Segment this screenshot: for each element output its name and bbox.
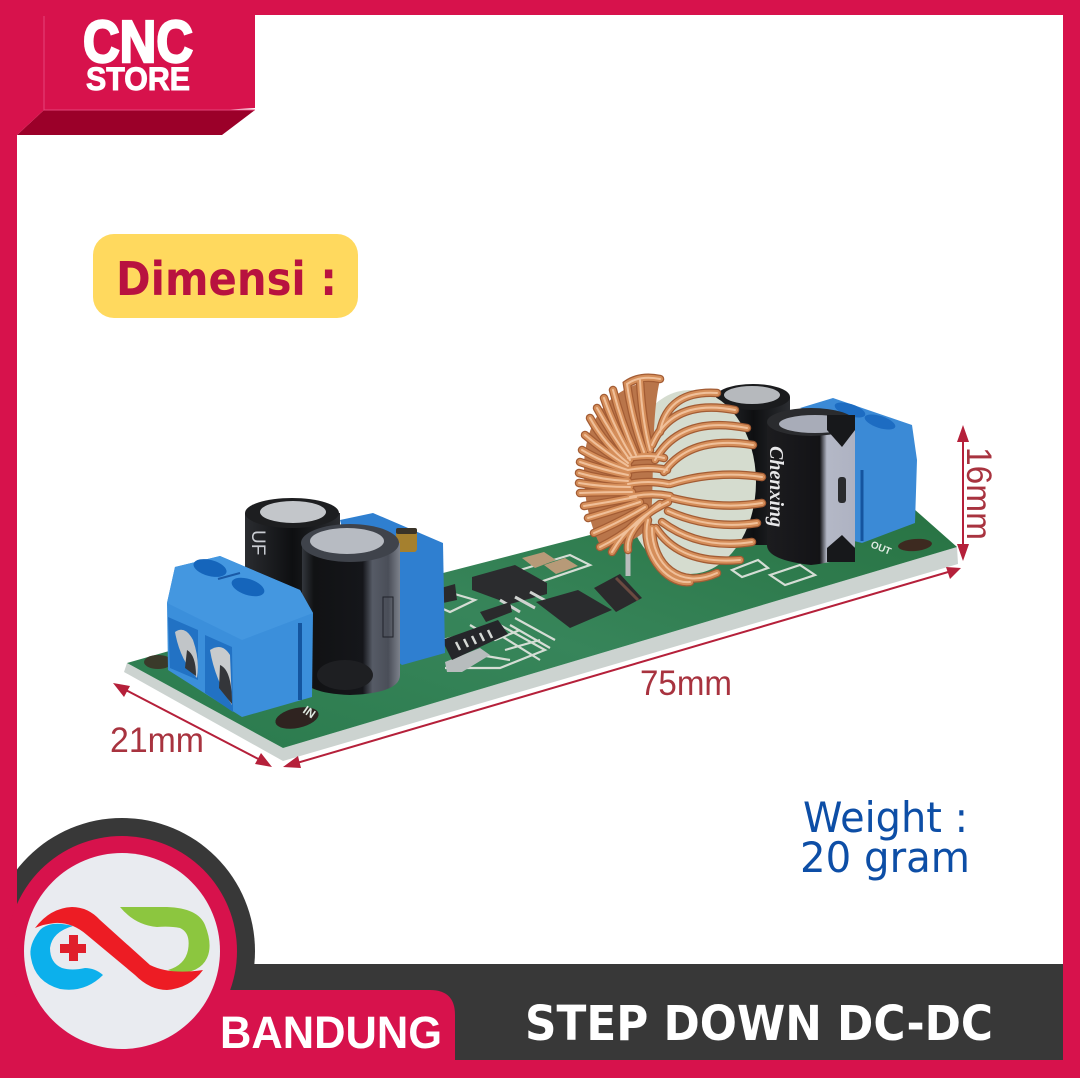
power chip 1 pins bbox=[500, 592, 548, 612]
driver IC bbox=[442, 620, 508, 660]
dimension 21mm bbox=[110, 683, 272, 767]
left frame cover bbox=[0, 800, 17, 1078]
inductor lead bbox=[626, 545, 630, 576]
16mm text: 16mm bbox=[959, 447, 998, 540]
capacitor brand: Chenxing bbox=[765, 446, 787, 527]
left front capacitor bbox=[301, 524, 400, 695]
right blue terminal bbox=[800, 398, 917, 543]
capacitor polarity mark bbox=[838, 477, 846, 503]
diode band bbox=[616, 578, 638, 600]
left blue terminal bbox=[167, 556, 313, 717]
bottom white edge bbox=[0, 1078, 1080, 1080]
screw 1 bbox=[175, 630, 198, 678]
capacitor base reflection bbox=[317, 660, 373, 690]
bottom dark bar bbox=[122, 964, 1063, 1061]
product title: STEP DOWN DC-DC bbox=[525, 996, 993, 1052]
logo circle bbox=[24, 853, 220, 1049]
toroid dark winding backing bbox=[584, 380, 660, 546]
mounting hole right bbox=[898, 538, 932, 552]
bandung tab bbox=[17, 990, 455, 1061]
IN label: IN bbox=[300, 703, 318, 721]
power chip 1 bbox=[472, 565, 547, 604]
75mm arrow bbox=[290, 570, 955, 765]
board edge bbox=[124, 547, 958, 761]
copper winding bbox=[579, 378, 762, 582]
mounting hole front bbox=[273, 704, 321, 732]
terminal holes bbox=[192, 556, 228, 580]
logo cross bbox=[60, 935, 86, 961]
small transistor bbox=[480, 602, 512, 622]
right front capacitor bbox=[765, 408, 855, 565]
bottom circle dark backing bbox=[0, 818, 255, 1080]
copper winding highlight bbox=[579, 378, 762, 582]
terminal front highlight bbox=[167, 556, 313, 640]
screw 2 bbox=[210, 647, 232, 705]
terminal slit bbox=[298, 623, 302, 700]
small SMD bbox=[441, 584, 457, 603]
trimmer gold screw bbox=[396, 530, 417, 552]
bottom red strip bbox=[0, 1060, 1080, 1078]
21mm text: 21mm bbox=[110, 721, 204, 760]
dimensi badge: Dimensi : bbox=[116, 252, 337, 306]
bottom red circle bbox=[7, 836, 237, 1066]
toroid core bbox=[624, 390, 756, 574]
capacitor black wrap notch bbox=[827, 415, 855, 447]
logo red band bbox=[35, 907, 203, 990]
OUT label: OUT bbox=[869, 540, 893, 558]
screw bay 2 bbox=[205, 635, 233, 712]
toroid inductor bbox=[579, 378, 762, 582]
dimension 16mm bbox=[957, 425, 998, 561]
terminal groove bbox=[218, 573, 240, 579]
mounting hole left back bbox=[144, 655, 172, 669]
power chip 2 bbox=[536, 590, 612, 628]
16mm arrow bbox=[962, 432, 964, 556]
silkscreen traces bbox=[441, 555, 815, 668]
smd capacitors bbox=[522, 552, 578, 574]
weight note: Weight : bbox=[803, 793, 968, 842]
right terminal holes bbox=[833, 399, 867, 421]
left back capacitor bbox=[245, 498, 340, 640]
capacitor polarity rectangle bbox=[383, 597, 393, 637]
21mm arrow bbox=[118, 686, 268, 764]
weight note bbox=[800, 793, 970, 882]
banner face bbox=[17, 15, 255, 135]
store logo banner bbox=[17, 9, 255, 135]
back capacitor marking: UF bbox=[247, 530, 268, 555]
trimmer potentiometer bbox=[340, 513, 445, 665]
right back capacitor bbox=[716, 384, 790, 545]
weight note: 20 gram bbox=[800, 833, 970, 882]
dimension 75mm bbox=[283, 567, 961, 768]
STORE wordmark: STORE bbox=[86, 61, 190, 97]
dimensi badge bbox=[93, 234, 358, 318]
diode bbox=[594, 574, 642, 612]
right terminal slit bbox=[860, 470, 864, 541]
logo green swoosh bbox=[120, 907, 210, 973]
75mm text: 75mm bbox=[640, 664, 732, 703]
circuit board bbox=[124, 470, 958, 761]
CNC wordmark: CNC bbox=[83, 9, 193, 75]
board top bbox=[127, 470, 957, 748]
logo blue swoosh bbox=[30, 924, 103, 990]
bandung label: BANDUNG bbox=[220, 1007, 442, 1058]
banner crease bbox=[44, 16, 255, 110]
copper winding shadow bbox=[579, 378, 762, 582]
driver IC pins bbox=[456, 630, 492, 650]
banner shade bbox=[17, 110, 255, 135]
solder joint bbox=[445, 648, 490, 672]
screw bay 1 bbox=[168, 617, 198, 680]
